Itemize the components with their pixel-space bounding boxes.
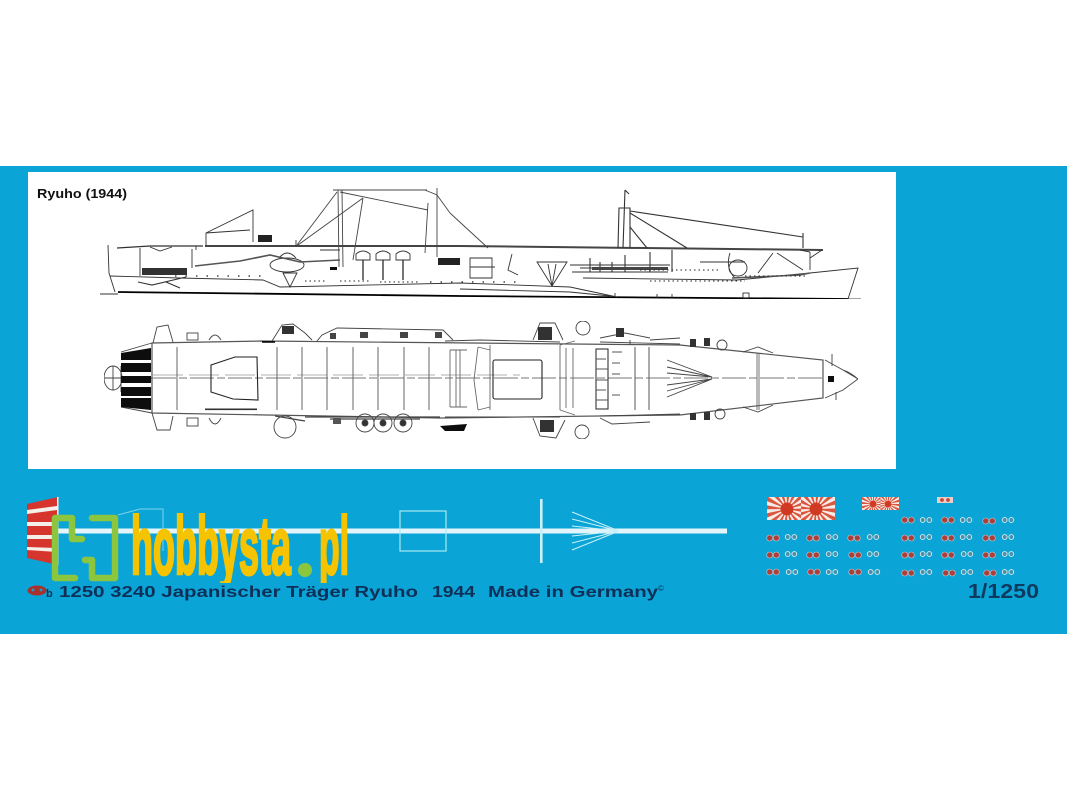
- decal: rear elevator outline: [118, 509, 163, 551]
- large rising sun flags: [767, 497, 835, 520]
- plan title: Ryuho (1944): [37, 186, 127, 201]
- watermark icon: green brackets: [55, 518, 115, 578]
- decal: forward elevator outline: [400, 511, 446, 551]
- product caption: ©: [658, 584, 664, 593]
- blue background band: [0, 166, 1067, 634]
- decal sheet infographic: pl: [319, 501, 349, 592]
- product caption: Made in Germany: [488, 584, 658, 601]
- product caption: [59, 584, 664, 601]
- watermark text: [132, 513, 348, 583]
- decal: fan of deck lines: [572, 512, 619, 550]
- product caption: 1944: [432, 584, 475, 601]
- panel: white ship plans: [28, 172, 896, 469]
- watermark dot: [298, 563, 312, 577]
- decal sheet infographic: [0, 166, 1067, 634]
- hinomaru roundels: right group: [902, 517, 1014, 576]
- decal: main white deck line: [58, 528, 727, 534]
- hinomaru roundels: left group: [767, 535, 880, 575]
- medium rising sun flags: [862, 497, 899, 510]
- top plan view of flight deck: [104, 321, 858, 439]
- product caption: 1250 3240 Japanischer Träger Ryuho: [59, 584, 418, 601]
- manufacturer logo: [28, 586, 53, 600]
- scale label: 1/1250: [968, 581, 1039, 603]
- watermark text: hobbysta: [131, 501, 292, 592]
- small rising sun flags: [937, 497, 953, 503]
- decal: red and white stern stripes: [27, 497, 58, 565]
- side elevation of ship: [100, 188, 861, 299]
- manufacturer logo: b: [46, 588, 53, 600]
- decal: cross wire: [540, 499, 543, 563]
